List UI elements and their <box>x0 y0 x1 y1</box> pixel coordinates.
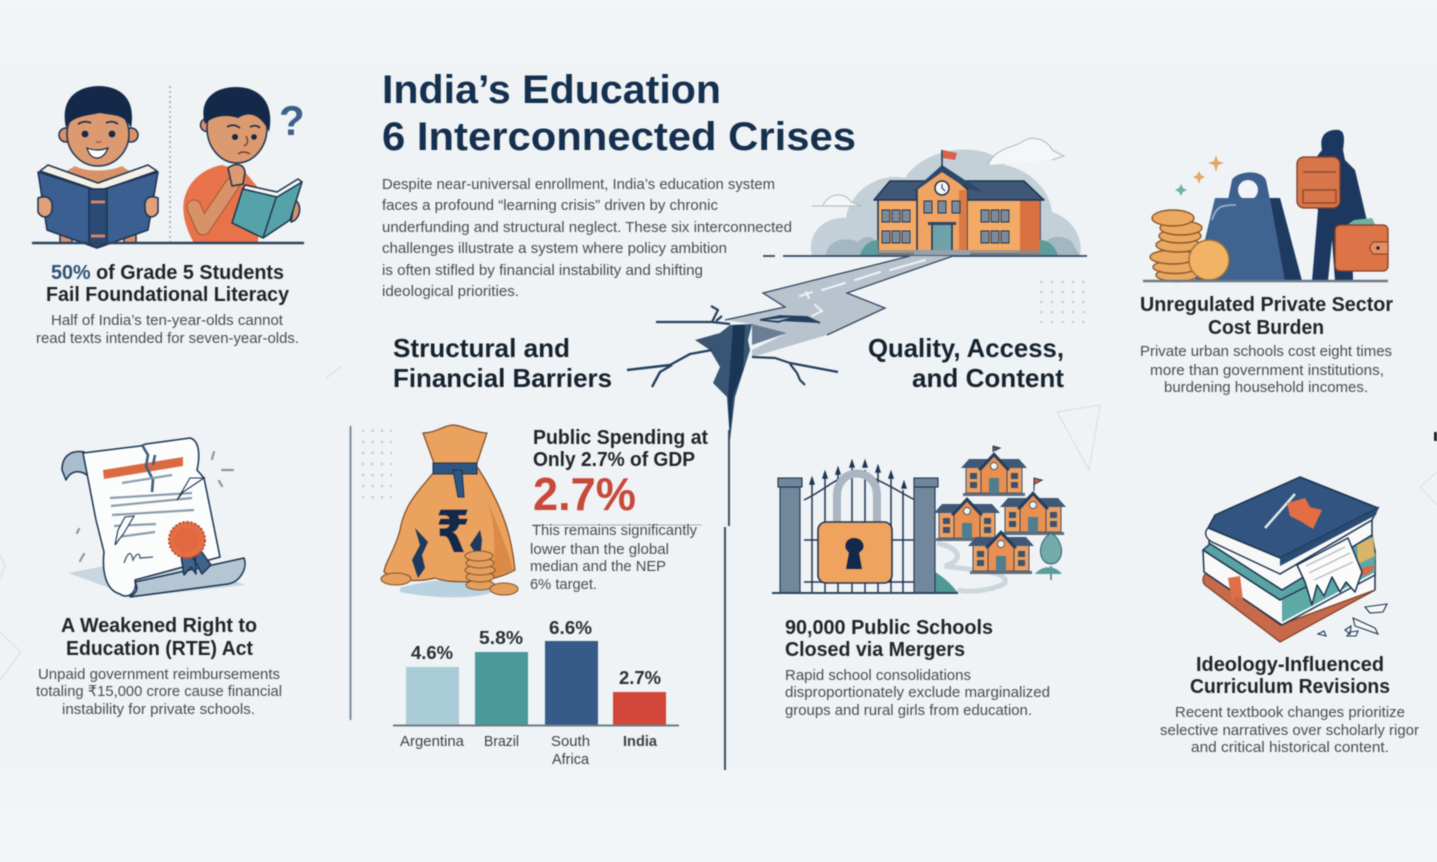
heading <box>533 427 708 471</box>
bar chart: South <box>551 733 590 750</box>
body text: Rapid school consolidations <box>785 667 971 684</box>
icon: torn legal scroll with seal <box>62 438 245 597</box>
body text: disproportionately exclude marginalized <box>785 684 1050 701</box>
decorative dot grid upper right <box>1039 279 1085 323</box>
icon: stack of books with torn pages and flag <box>1203 477 1387 642</box>
heading <box>785 617 993 661</box>
big statistic: 2.7% <box>533 468 636 520</box>
body text: Half of India’s ten-year-olds cannot <box>51 312 284 329</box>
body text: and critical historical content. <box>1191 739 1389 756</box>
panel: weakened RTE act <box>36 438 282 718</box>
body text: 6% target. <box>530 576 597 593</box>
heading: Public Spending at <box>533 427 708 449</box>
body text: instability for private schools. <box>62 701 255 718</box>
panel: foundational literacy <box>32 86 305 347</box>
intro paragraph: ideological priorities. <box>382 283 519 300</box>
heading: 50% of Grade 5 Students <box>51 262 284 284</box>
section heading: structural and financial barriers: Structural and <box>393 333 570 363</box>
section heading: quality, access and content: Quality, Access, <box>868 333 1064 363</box>
bar chart: Argentina <box>400 733 465 750</box>
heading: 90,000 Public Schools <box>785 617 993 639</box>
bar chart: 4.6% <box>411 643 453 663</box>
panel divider left <box>350 426 352 720</box>
panel: school mergers <box>772 446 1066 719</box>
panel: curriculum revisions <box>1160 477 1419 756</box>
bar chart: 2.7% <box>619 668 661 688</box>
section heading: quality, access and content: and Content <box>912 363 1064 393</box>
heading <box>1140 294 1393 339</box>
main title <box>382 68 856 159</box>
main title: India’s Education <box>382 68 721 112</box>
body text: Unpaid government reimbursements <box>38 666 280 683</box>
heading: Closed via Mergers <box>785 639 965 661</box>
body text: Recent textbook changes prioritize <box>1175 704 1405 721</box>
road breaking into a crack <box>627 256 953 440</box>
heading: Education (RTE) Act <box>66 638 253 660</box>
decorative dot grid by money bag <box>362 425 392 499</box>
body text <box>530 522 702 593</box>
heading <box>61 615 257 660</box>
body text <box>36 666 282 718</box>
icon: torn money bag with rupee and coins: ₹ <box>436 498 470 566</box>
bar chart: 5.8% <box>479 628 523 648</box>
body text: Private urban schools cost eight times <box>1140 343 1392 360</box>
bar chart <box>393 618 679 768</box>
bar chart: Brazil <box>484 733 519 750</box>
panel: public spending <box>381 425 708 768</box>
section heading: quality, access and content <box>868 333 1064 393</box>
intro paragraph <box>382 176 792 300</box>
bar chart: Africa <box>552 751 590 768</box>
heading: Cost Burden <box>1208 317 1324 339</box>
body text: read texts intended for seven-year-olds. <box>36 330 299 347</box>
bar chart: 6.6% <box>549 618 592 638</box>
body text <box>1160 704 1419 756</box>
heading: Curriculum Revisions <box>1190 676 1390 698</box>
body text <box>1140 343 1392 396</box>
body text: groups and rural girls from education. <box>785 702 1032 719</box>
body text: more than government institutions, <box>1150 362 1384 379</box>
heading: Fail Foundational Literacy <box>46 284 290 306</box>
body text: totaling ₹15,000 crore cause financial <box>36 683 282 700</box>
body text: lower than the global <box>530 541 669 558</box>
body text: This remains significantly <box>532 522 697 539</box>
heading <box>1190 654 1390 698</box>
intro paragraph: challenges illustrate a system where policy ambition <box>382 240 727 257</box>
panel: private sector cost burden <box>1140 130 1393 396</box>
crack chasm <box>627 306 838 440</box>
body text: median and the NEP <box>530 558 666 575</box>
intro paragraph: is often stifled by financial instability and shifting <box>382 262 703 279</box>
central divider <box>725 430 729 770</box>
heading: Only 2.7% of GDP <box>533 449 695 471</box>
body text: selective narratives over scholarly rigor <box>1160 722 1419 739</box>
heading: A Weakened Right to <box>61 615 257 637</box>
section heading: structural and financial barriers <box>393 333 612 393</box>
icon: torn money bag with rupee and coins <box>381 425 518 597</box>
heading: Ideology-Influenced <box>1196 654 1384 676</box>
heading: Unregulated Private Sector <box>1140 294 1393 316</box>
icon: boy reading happily and boy confused <box>32 86 305 248</box>
body text: burdening household incomes. <box>1164 379 1368 396</box>
intro paragraph: Despite near-universal enrollment, India’s education system <box>382 176 775 193</box>
main title: 6 Interconnected Crises <box>382 115 856 159</box>
icon: coins, weight, person with backpack and wallet <box>1143 130 1388 282</box>
icon: locked gate and clustered schools <box>772 446 1066 593</box>
intro paragraph: underfunding and structural neglect. These six interconnected <box>382 219 792 236</box>
icon: boy reading happily and boy confused: ? <box>279 97 305 144</box>
section heading: structural and financial barriers: Financial Barriers <box>393 363 612 393</box>
body text <box>785 667 1050 719</box>
heading <box>46 262 290 306</box>
intro paragraph: faces a profound “learning crisis” driven by chronic <box>382 197 719 214</box>
illustration: school on the horizon <box>763 138 1087 256</box>
bar chart: India <box>623 733 658 750</box>
body text <box>36 312 299 347</box>
faint background geometry <box>0 366 1437 680</box>
